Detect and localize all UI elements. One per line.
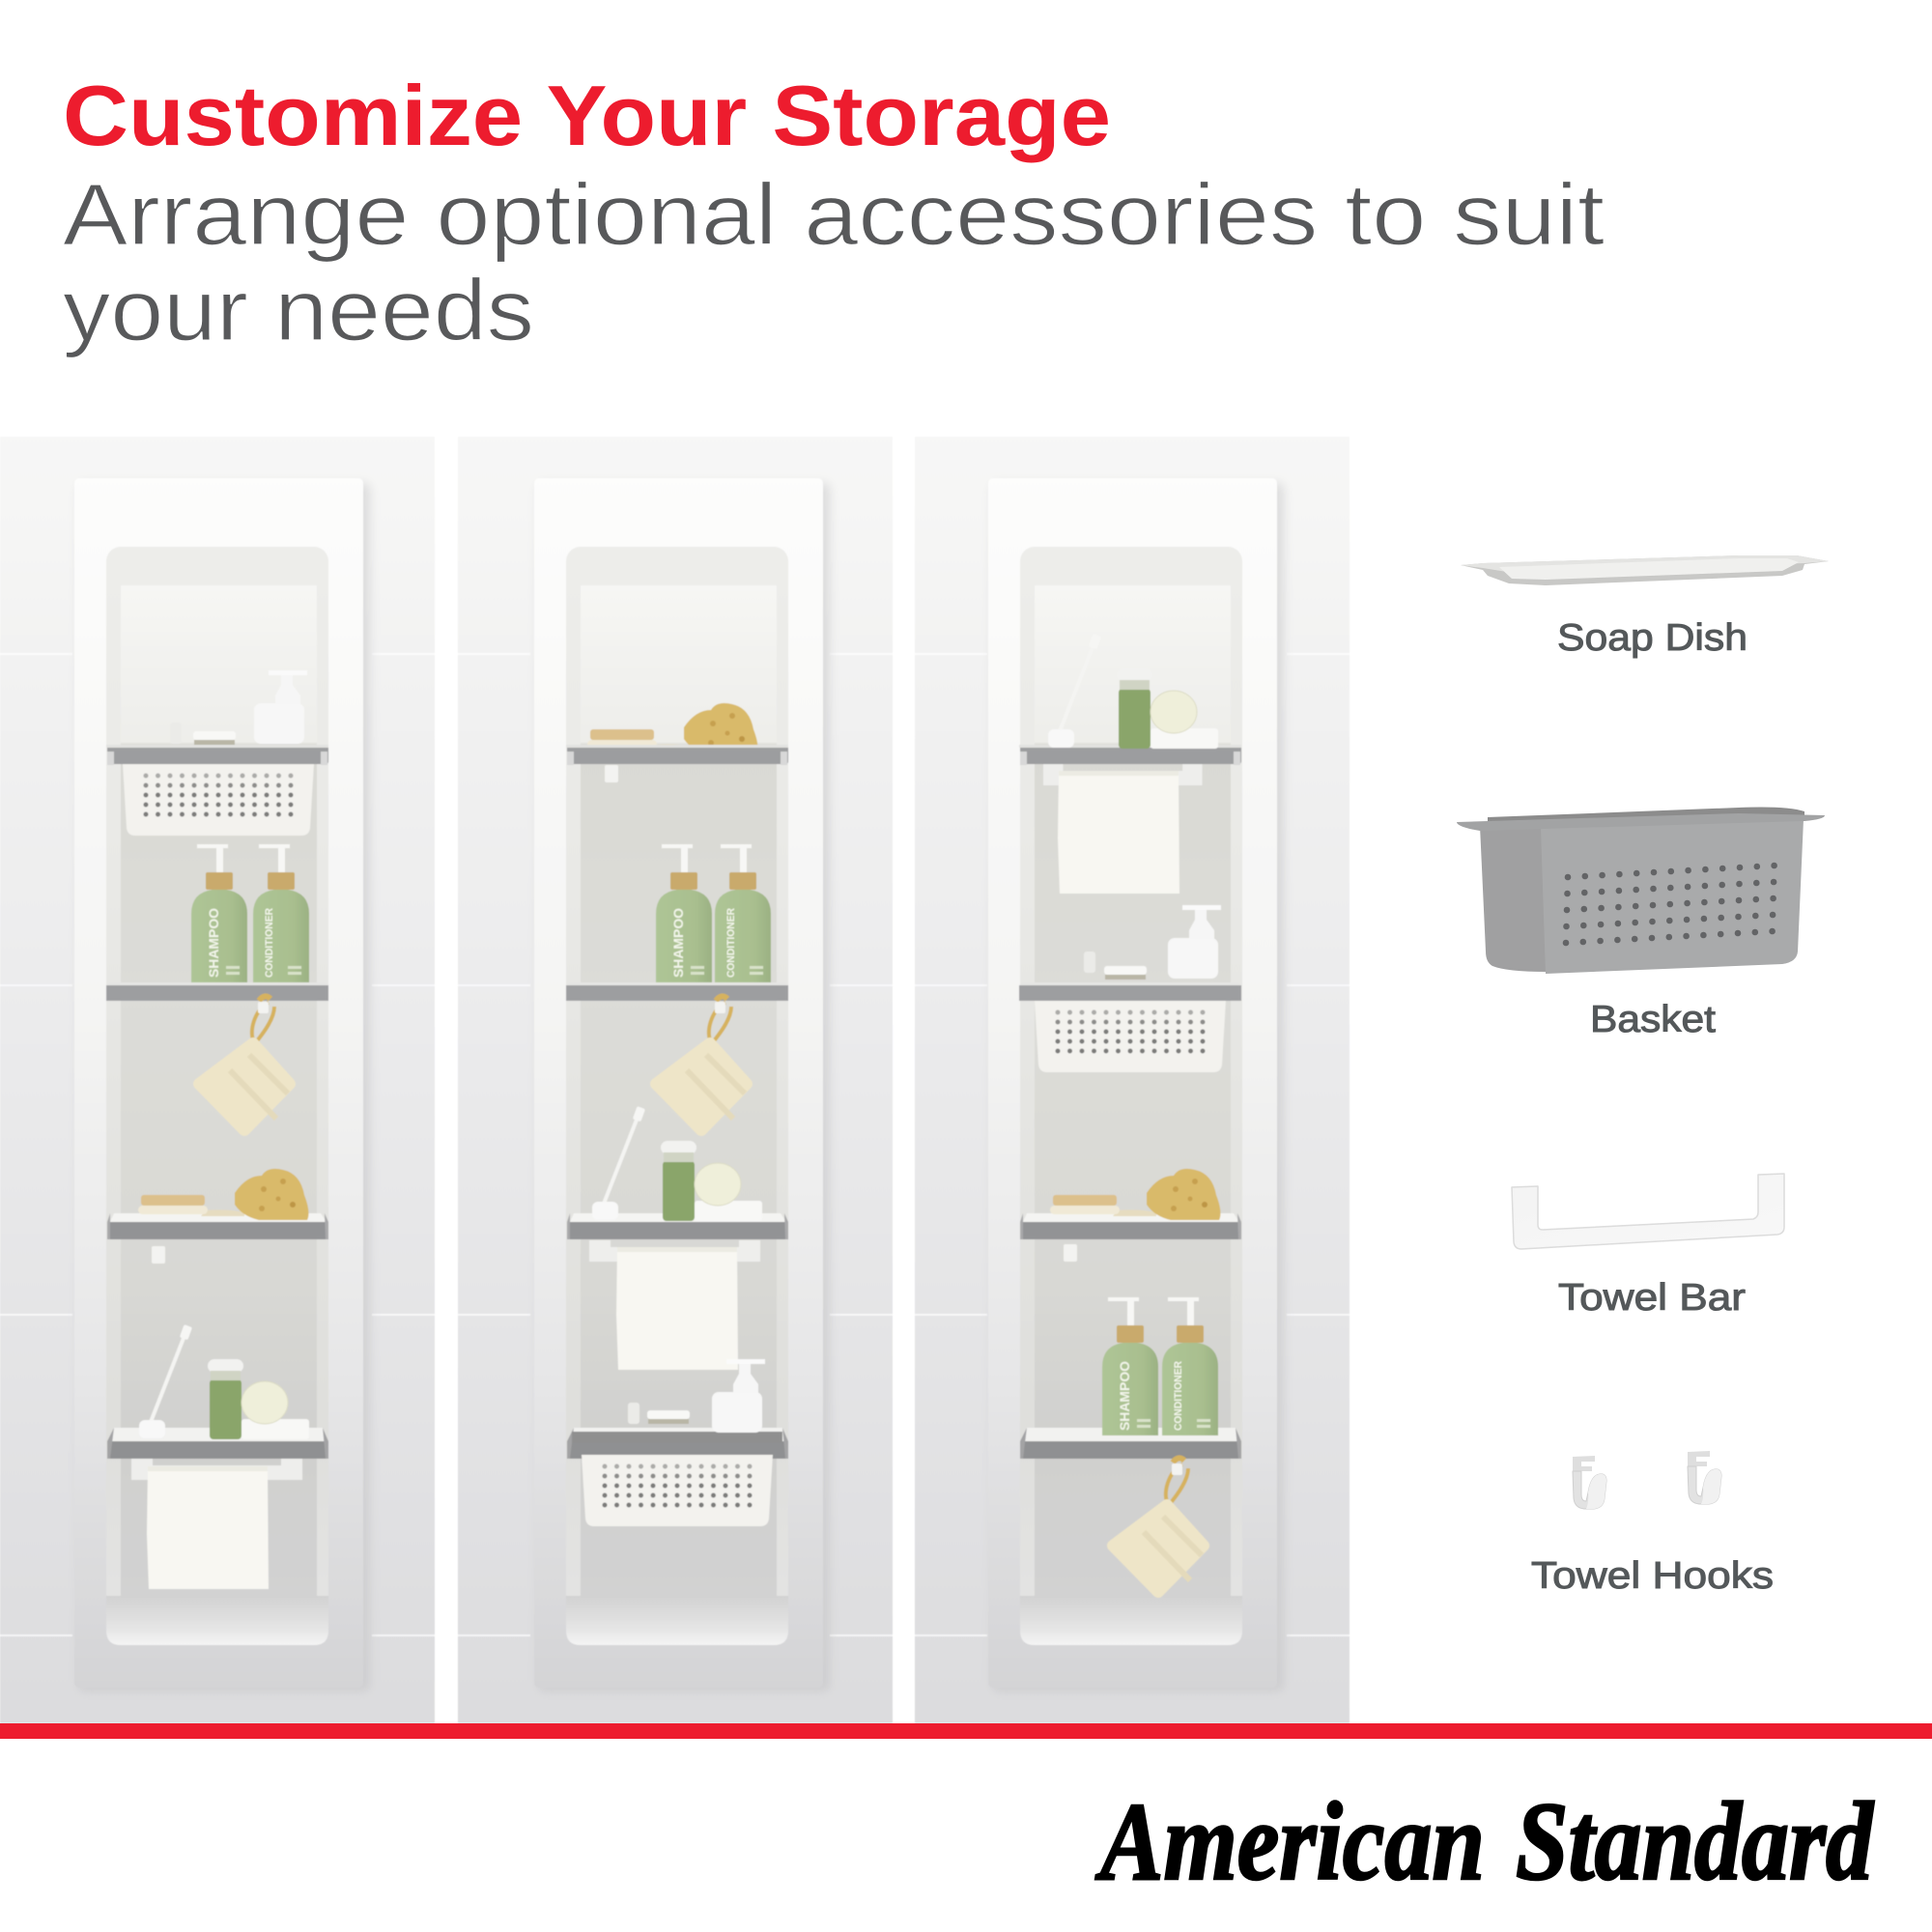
shampoo bottle: SHAMPOO xyxy=(206,908,221,978)
towel bar xyxy=(1043,764,1203,785)
small hook xyxy=(152,1246,165,1264)
small hook xyxy=(605,765,618,782)
accessory: soap dish xyxy=(1461,555,1829,659)
title: heading and subheading xyxy=(63,68,1605,359)
accessory: towel bar xyxy=(1512,1174,1784,1319)
small hook xyxy=(1064,1244,1077,1262)
shelf 2 items: pump, jar and cup xyxy=(1084,905,1221,980)
conditioner bottle xyxy=(1162,1297,1218,1435)
conditioner bottle xyxy=(253,844,309,982)
conditioner bottle: CONDITIONER xyxy=(1173,1361,1184,1431)
subheading line two: your needs xyxy=(63,263,534,359)
shelf four xyxy=(107,1428,328,1459)
accessory: basket xyxy=(1457,808,1825,1040)
icon: soap dish xyxy=(1461,555,1829,585)
shelf two xyxy=(1019,982,1241,1001)
shelf three xyxy=(1020,1213,1241,1239)
towel bar xyxy=(131,1459,302,1480)
logo: American Standard: Standard xyxy=(1516,1780,1875,1904)
shampoo bottle: SHAMPOO xyxy=(670,908,686,978)
shampoo bottle xyxy=(656,844,712,982)
towel xyxy=(1058,771,1179,894)
brush and sponge xyxy=(1050,1169,1220,1220)
conditioner bottle: CONDITIONER xyxy=(264,908,275,978)
shelf 4 items: pump, jar and cup xyxy=(628,1359,765,1433)
panel: niche configuration two xyxy=(458,437,893,1723)
icon: towel bar xyxy=(1512,1174,1784,1249)
shelf one xyxy=(1019,745,1241,765)
shelf two xyxy=(566,982,788,1001)
hook with pouch xyxy=(656,996,747,1130)
subheading line one: Arrange optional accessories to suit xyxy=(63,167,1605,264)
icon: left hook xyxy=(1573,1456,1606,1509)
hook with pouch xyxy=(199,996,290,1130)
towel xyxy=(616,1247,738,1370)
shelf three xyxy=(107,1213,328,1239)
basket xyxy=(582,1455,773,1526)
shelf one xyxy=(566,745,788,765)
toothbrush, bottle and soap xyxy=(592,1106,762,1221)
towel bar xyxy=(589,1240,760,1262)
red divider bar xyxy=(0,1723,1932,1739)
panel: niche configuration three xyxy=(915,437,1350,1723)
logo: American Standard: American xyxy=(1095,1780,1485,1904)
icon: basket xyxy=(1457,808,1825,974)
conditioner bottle: CONDITIONER xyxy=(725,908,737,978)
toothbrush, bottle and soap xyxy=(139,1324,309,1439)
toothbrush, bottle and soap xyxy=(1048,634,1218,749)
icon: right hook xyxy=(1688,1451,1721,1504)
shelf 1 items: pump, jar and cup xyxy=(170,670,307,745)
shelf two xyxy=(106,982,328,1001)
towel xyxy=(147,1466,269,1589)
hook with pouch xyxy=(1113,1458,1204,1592)
accessory: towel hooks xyxy=(1531,1451,1774,1597)
brush and sponge xyxy=(138,1169,308,1220)
shelf three xyxy=(567,1213,788,1239)
basket xyxy=(123,764,314,836)
heading: Customize Your Storage xyxy=(63,68,1111,163)
label: towel bar: Towel Bar xyxy=(1558,1277,1746,1319)
shelf one xyxy=(106,745,328,765)
label: basket: Basket xyxy=(1590,999,1716,1040)
shampoo bottle: SHAMPOO xyxy=(1117,1361,1132,1431)
conditioner bottle xyxy=(715,844,771,982)
panel: niche configuration one xyxy=(0,437,435,1723)
shampoo bottle xyxy=(1102,1297,1158,1435)
shelf four xyxy=(567,1428,788,1459)
label: soap dish: Soap Dish xyxy=(1557,617,1747,659)
shampoo bottle xyxy=(191,844,247,982)
logo: American Standard xyxy=(1095,1780,1875,1904)
basket xyxy=(1035,1001,1226,1072)
label: towel hooks: Towel Hooks xyxy=(1531,1555,1774,1597)
shelf four xyxy=(1020,1428,1241,1459)
shelf 1 items: brush and sponge xyxy=(587,703,757,754)
